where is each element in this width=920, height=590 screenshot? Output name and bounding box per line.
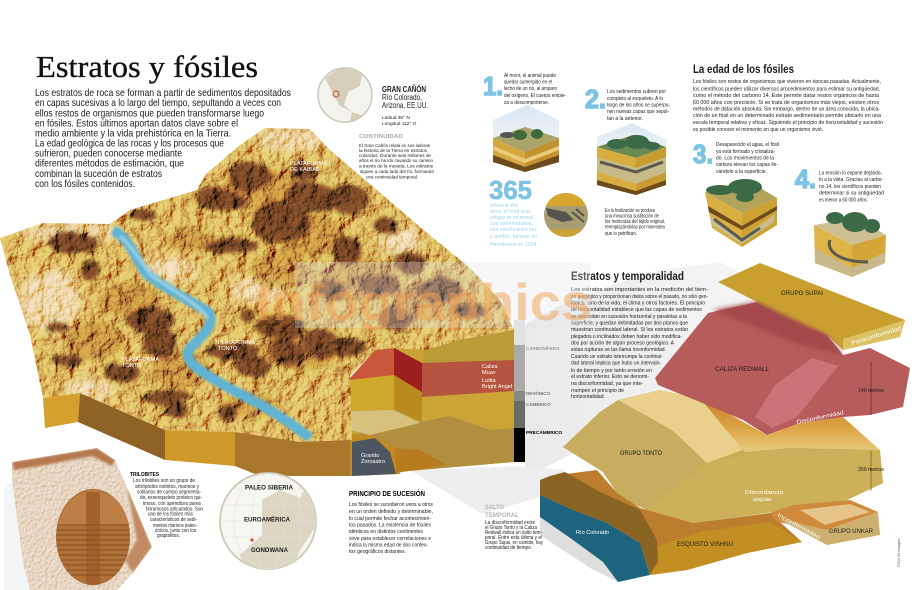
step 2: 2. — [585, 84, 606, 114]
credit: ©Sol 90 Images — [896, 538, 901, 567]
temporal gap: TEMPORAL — [485, 512, 519, 519]
stratigraphic column: PRECÁMBRICO — [526, 429, 563, 436]
trilobites text — [130, 472, 203, 539]
location info: Longitud 112° O — [382, 121, 417, 127]
label Tonto: GRUPO TONTO — [620, 450, 662, 457]
age of fossils text — [693, 79, 883, 133]
age of fossils text: escala temporal relativa y eficaz. Siguiendo el principio de horizontalidad y sucesión — [693, 120, 883, 126]
age of fossils text: métodos de datación absoluta. Sin embargo, dentro de un área conocida, la ubica- — [693, 106, 880, 112]
inset fossil circle — [544, 193, 588, 238]
continuity text: siguen a cada lado del río, formando — [360, 169, 434, 175]
label disconformity: Disconformidad — [796, 410, 844, 426]
strata and time text: po geológico y proporcionan datos sobre el pasado, no sólo geo- — [571, 294, 708, 300]
continuity text: a través de la meseta. Los estratos — [359, 164, 434, 170]
trilobites text: birramosos articulados. Son — [146, 506, 203, 512]
cross-section of rock layers: Muav — [482, 370, 496, 376]
strata and time text: Los estratos son importantes en la medición del tiem- — [571, 287, 708, 293]
stat: 365 — [489, 175, 538, 248]
principle of succession: PRINCIPIO DE SUCESIÓN — [349, 489, 425, 498]
age of fossils text: Los fósiles son restos de organismos que vivieron en épocas pasadas. Actualmente, — [693, 79, 881, 85]
age of fossils text: como el método del carbono 14. Este permite datar restos orgánicos de hasta — [693, 93, 880, 99]
granite label: Granito — [361, 453, 379, 459]
strata slab: Supai group — [718, 263, 905, 350]
step 1: za a descomponerse. — [504, 100, 549, 106]
fossilization text — [605, 208, 665, 237]
strata and time text: lógico, sino de la vida, el clima y otros factores. El principio — [571, 300, 705, 306]
trilobites text: mentos marinos paleo- — [153, 523, 197, 529]
continuity text: El Gran Cañón relata en sus laderas — [359, 143, 431, 149]
trilobites text: Los trilobites son un grupo de — [133, 478, 195, 484]
heading: age of fossils: La edad de los fósiles — [693, 62, 794, 76]
step 3: ya está formado y cristaliza- — [716, 149, 775, 155]
strata and time text — [571, 287, 708, 400]
step 4: La erosión lo expone dejándo- — [819, 170, 882, 176]
step 3: 3. — [693, 139, 713, 169]
stratigraphic column: CÁMBRICO — [526, 401, 551, 407]
block 2 — [597, 123, 667, 195]
step 4 — [795, 164, 884, 204]
temporal gap: Redwall indica un salto tem- — [485, 530, 542, 536]
label angular unconformity: Discordancia — [745, 490, 784, 496]
label Redwall: CALIZA REDWALL — [715, 366, 769, 373]
cross-section of rock layers: Lutita — [482, 378, 497, 384]
stat: 365: y anfibio, hallado en — [490, 234, 537, 240]
cross-section of rock layers — [350, 329, 514, 476]
label Paraconformidad: Paraconformidad — [851, 326, 902, 347]
step 1: quedar sumergido en el — [504, 80, 552, 86]
block 1 with water — [493, 105, 559, 172]
trilobites text: característicos de sedi- — [150, 517, 197, 523]
temporal gap — [485, 504, 543, 551]
terrain labels: TONTO — [122, 363, 142, 369]
principle of succession — [349, 489, 433, 555]
step 2: completo al esqueleto. A lo — [607, 96, 663, 102]
strata and time text: rrumpen el principio de — [571, 388, 624, 394]
location info: Arizona, EE.UU. — [382, 101, 428, 110]
stratigraphic column — [514, 320, 563, 462]
label Río Colorado: Río Colorado — [576, 530, 609, 536]
stat: 365: Pensilvania en 2004. — [490, 242, 538, 248]
principle of succession: idénticos en distintos continentes — [349, 529, 423, 535]
step 1: 1. — [483, 71, 503, 101]
paleogeographic globe: GONDWANA — [251, 547, 288, 554]
label angular unconformity: angular — [753, 497, 772, 503]
step 2: largo de los años se superpo- — [607, 102, 670, 108]
terrain labels: PLATAFORMA — [122, 357, 159, 363]
strata slab: Unkar group — [770, 500, 880, 545]
intro text block: en capas sucesivas a lo largo del tiempo, sepultando a veces con — [35, 98, 281, 109]
step 1: Al morir, el animal puede — [504, 73, 556, 79]
fossilization text: que lo petrifican. — [605, 231, 637, 237]
temporal gap: poral. Entre esta última y el — [485, 535, 542, 541]
strata and time text: de horizontalidad establece que las capas de sedimentos — [571, 307, 702, 313]
globe labels: PALEO SIBERIA — [245, 484, 293, 492]
stat: 365: antiguo de un animal — [490, 215, 533, 221]
continuity text: años el río ha ido cavando su camino — [359, 158, 433, 164]
trilobite fossil photo — [12, 448, 152, 590]
trilobites text: uno de los fósiles más — [148, 512, 193, 518]
temporal gap: Grupo Supai, en cambio, hay — [485, 540, 543, 546]
label 350 metros: 350 metros — [858, 467, 884, 473]
strata and time text: estas rupturas se las llama inconformidad. — [571, 347, 666, 353]
stat: 365: 365 — [489, 175, 532, 205]
cross-section of rock layers: Bright Angel — [482, 384, 512, 390]
strata slab: Tonto group — [563, 390, 884, 523]
locator globe — [318, 68, 372, 128]
label Vishnu: ESQUISTO VISHNU — [677, 541, 733, 548]
age of fossils text: ción de un fósil en un determinado estrato sedimentario permite ubicarlo en una — [693, 113, 882, 119]
principle of succession: Los fósiles se sucedieron unos a otros — [349, 502, 433, 508]
strata slab: Redwall limestone — [655, 302, 910, 435]
terrain labels — [122, 161, 327, 369]
background shadow band behind strata — [4, 262, 790, 590]
strata slab: Vishnu schist — [540, 470, 802, 582]
fossilization text: una minuciosa sustitución de — [605, 214, 659, 220]
temporal gap: continuidad de tiempo. — [485, 545, 532, 551]
era labels: CARBONÍFERO — [526, 344, 560, 351]
principle of succession: tos geográficos distantes. — [349, 549, 406, 555]
strata and time text: muestran continuidad lateral. Si los estratos están — [571, 327, 688, 333]
block 3 — [705, 179, 777, 247]
continuity text — [359, 134, 434, 180]
fossilization text: En la fosilización se produce — [605, 208, 655, 214]
step 2: tan a la anterior. — [607, 116, 643, 122]
temporal gap: SALTO — [485, 504, 504, 511]
strata and time text: lo de tiempo y por tanto erosión en — [571, 368, 652, 374]
step 4: no 14, los científicos pueden — [819, 184, 881, 190]
temporal gap: el Grupo Tonto y la Caliza — [485, 525, 538, 531]
continuity text: una continuidad temporal. — [366, 174, 418, 180]
trilobites text: tinoso, con apéndices pares — [143, 501, 201, 507]
heading: strata and time: Estratos y temporalidad — [571, 269, 684, 283]
strata and time text: Cuando un estrato interrumpe la continui- — [571, 354, 663, 360]
step 1: del oxígeno. El cuerpo empie- — [504, 93, 566, 99]
terrain labels: TONTO — [218, 346, 238, 352]
temporal gap: La discorformidad entre — [485, 520, 535, 526]
strata and time text: superficie, y quedan delimitadas por dos planos que — [571, 320, 688, 326]
step 4: 4. — [795, 164, 816, 194]
strata and time text: dad lateral implica que hubo un intervalo- — [571, 360, 661, 366]
fossilization text: reemplazándolas por minerales — [605, 224, 665, 230]
step 2 — [585, 84, 670, 122]
strata and time text: se depositan en sucesión horizontal y paralelas a la — [571, 314, 688, 320]
strata and time text: na discorformidad, ya que inte- — [571, 381, 643, 387]
watermark: Infographics — [256, 274, 592, 332]
label Supai: GRUPO SUPAI — [781, 290, 823, 297]
intro text block: en fósiles. Estos últimos aportan datos clave sobre el — [35, 118, 238, 130]
location info — [382, 85, 428, 127]
continuity text: la historia de la Tierra en estratos — [359, 148, 428, 154]
location info: Río Colorado, — [382, 93, 422, 102]
principle of succession: en un orden definido y determinable, — [349, 509, 433, 515]
intro text block: con los fósiles contenidos. — [35, 179, 135, 190]
continuity text: CONTINUIDAD — [359, 134, 403, 140]
label 140 metros: 140 metros — [858, 388, 884, 394]
step 1: lecho de un río, al amparo — [504, 86, 557, 92]
location info: GRAN CAÑÓN — [382, 85, 426, 94]
strata and time text: el estrato inferior. Esto se denomi- — [571, 374, 649, 380]
label Unkar: GRUPO UNKAR — [829, 528, 873, 535]
intro text block: ellos restos de organismos que pueden transformarse luego — [35, 108, 264, 120]
intro text block: medio ambiente y la vida prehistórica en la Tierra. — [35, 128, 231, 140]
step 4: es menor a 60 000 años. — [819, 198, 868, 204]
paleogeographic globe: EUROAMÉRICA — [244, 514, 290, 524]
Muav limestone label: Caliza — [482, 364, 498, 370]
continuity text: coloridos. Durante seis millones de — [359, 153, 431, 159]
step 3 — [693, 139, 779, 175]
terrain labels: PLATAFORMA — [218, 340, 255, 346]
stat: 365: millones de años — [490, 203, 518, 209]
principle of succession: lo cual permite fechar acontecimien- — [349, 516, 431, 522]
step 3: corteza elevan los capas lle- — [716, 162, 778, 168]
strata and time text: horizontalidad. — [571, 394, 605, 400]
terrain labels: PLATAFORMA — [290, 161, 327, 167]
stratigraphic column: DEVÓNICO — [526, 389, 551, 396]
trilobites text: TRILOBITES — [130, 472, 159, 478]
age of fossils text: 60 000 años con precisión. Si se trata de organismos más viejos, existen otros — [693, 100, 879, 106]
principle of succession: indica la misma edad de dos contex- — [349, 542, 428, 548]
fossilization text: los moléculas del tejido original, — [605, 219, 665, 225]
river — [113, 230, 310, 438]
step 3: Desaparecido el agua, el fósil — [716, 142, 779, 148]
step 4: lo a la vista. Gracias al carbo- — [819, 177, 883, 183]
intro text block: combinan la suceción de estratos — [35, 169, 162, 180]
terrain labels: DE KAIBAB — [290, 167, 320, 173]
label angular unconformity — [745, 490, 784, 503]
step 1 — [483, 71, 566, 106]
stat: 365: con extremidades, — [490, 221, 533, 227]
step 2: nen nuevas capas que sepul- — [607, 109, 669, 115]
intro text block — [35, 88, 291, 190]
trilobites text: zoicos, junto con los — [155, 528, 196, 534]
principle of succession: tos pasados. La existencia de fósiles — [349, 522, 431, 528]
block 4 — [814, 212, 886, 277]
intro text block: La edad geológica de las rocas y los procesos que — [35, 138, 224, 150]
intro text block: sufrieron, pueden conocerse mediante — [35, 148, 182, 160]
intro text block: diferentes métodos de estimación, que — [35, 158, 184, 170]
strata and time text: plegados o inclinados deben haber sido modifica- — [571, 334, 682, 340]
trilobites text: artrópodos extintos, marinos y — [135, 484, 199, 490]
terrain block: canyon side walls — [43, 393, 352, 476]
stat: 365: tiene el fósil más — [490, 209, 531, 215]
step 2: Los sedimentos cubren por — [607, 89, 666, 95]
trilobites text: graptolitos. — [157, 533, 180, 539]
step 4: determinar si su antigüedad — [819, 190, 884, 196]
age of fossils text: los científicos pueden utilizar diversos procedimientos para estimar su antigüedad, — [693, 86, 880, 92]
terrain: Grand Canyon relief — [0, 120, 520, 450]
principle of succession: sirve para establecer correlaciones e — [349, 536, 431, 542]
step 3: do. Los movimientos de la — [716, 156, 775, 162]
trilobites text: solitarios de cuerpo segmenta- — [137, 490, 201, 496]
intro text block: Los estratos de roca se forman a partir de sedimentos depositados — [35, 88, 291, 99]
step 3: vándolo a la superficie. — [716, 169, 767, 175]
strata and time text: dos por acción de algún proceso geológico. A — [571, 340, 674, 346]
label Inconformidad: Inconformidad — [776, 513, 821, 541]
paleogeographic globe — [220, 473, 320, 570]
title: Estratos y fósiles — [36, 49, 258, 84]
age of fossils text: es posible conocer el momento en que un organismo vivió. — [693, 127, 823, 133]
trilobites text: do, exoesqueleto proteico qui- — [140, 495, 202, 501]
cross-section of rock layers: Zoroastro — [361, 459, 385, 465]
location info: Latitud 36° N — [382, 115, 410, 121]
stat: 365: una mezcla entre pez — [490, 227, 537, 233]
